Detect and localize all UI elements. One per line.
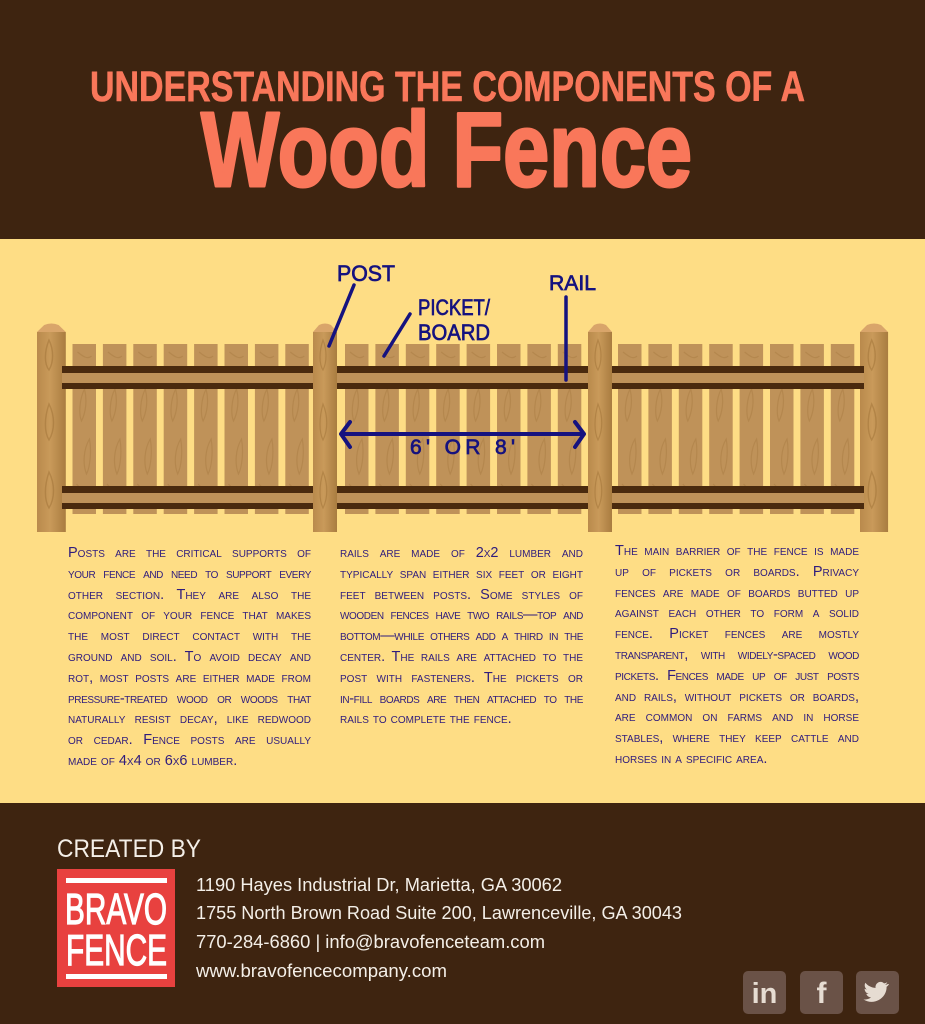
- fence section 3: [612, 344, 864, 514]
- contact details: 1755 North Brown Road Suite 200, Lawrenceville, GA 30043: [196, 903, 682, 923]
- label: picket/board: PICKET/: [418, 295, 491, 320]
- text block: rails: post with fasteners. The pickets or: [340, 670, 583, 686]
- text block: pickets: are common on farms and in horse: [615, 709, 859, 725]
- title: [90, 63, 805, 209]
- label: picket/board: [384, 295, 491, 356]
- label: picket/board: BOARD: [418, 320, 490, 345]
- icon: facebook: f: [816, 977, 828, 1010]
- text block: posts: or cedar. Fence posts are usually: [68, 732, 311, 748]
- text block: posts: other section. They are also the: [68, 587, 311, 603]
- text block: rails: center. The rails are attached to the: [340, 649, 583, 665]
- text block: rails: rails are made of 2x2 lumber and: [340, 545, 583, 561]
- label: rail: [549, 272, 596, 380]
- text block: pickets: and rails, without pickets or boards,: [615, 689, 859, 705]
- contact details: 770-284-6860 | info@bravofenceteam.com: [196, 932, 545, 952]
- text block: posts: rot, most posts are either made from: [68, 670, 311, 686]
- text block: posts: Posts are the critical supports of: [68, 545, 311, 561]
- fence section 1: [62, 344, 314, 514]
- text block: pickets: [615, 543, 859, 767]
- label: post: POST: [337, 261, 395, 286]
- arrow: section width: [341, 422, 584, 459]
- text block: pickets: The main barrier of the fence is made: [615, 543, 859, 559]
- text block: rails: bottom—while others add a third in the: [340, 628, 583, 644]
- text block: posts: your fence and need to support every: [68, 566, 311, 582]
- icon: linkedin: in: [752, 978, 777, 1010]
- contact details: 1190 Hayes Industrial Dr, Marietta, GA 30062: [196, 875, 562, 895]
- text block: pickets: fence. Picket fences are mostly: [615, 626, 859, 642]
- fence section 2: [336, 344, 588, 514]
- text block: posts: the most direct contact with the: [68, 628, 311, 644]
- icon: twitter: [856, 971, 899, 1014]
- contact details: [195, 875, 682, 981]
- logo: Bravo Fence: [57, 869, 175, 987]
- text block: rails: typically span either six feet or eight: [340, 566, 583, 582]
- inner fence posts: [313, 324, 612, 532]
- text block: pickets: fences are made of boards butted up: [615, 585, 859, 601]
- text block: pickets: against each other to form a solid: [615, 605, 859, 621]
- text block: posts: naturally resist decay, like redwood: [68, 711, 311, 727]
- text block: rails: wooden fences have two rails—top and: [340, 607, 583, 623]
- label: rail: RAIL: [549, 272, 596, 295]
- text block: pickets: horses in a specific area.: [615, 751, 767, 767]
- contact details: www.bravofencecompany.com: [195, 961, 447, 981]
- text block: rails: in-fill boards are then attached to the: [340, 691, 583, 707]
- icon: linkedin: [743, 971, 786, 1014]
- text block: pickets: pickets. Fences made up of just posts: [615, 668, 859, 684]
- text block: posts: pressure-treated wood or woods that: [68, 691, 311, 707]
- text block: posts: [68, 545, 312, 769]
- heading: created by: CREATED BY: [57, 835, 201, 863]
- text block: rails: rails to complete the fence.: [340, 711, 512, 727]
- text block: pickets: up of pickets or boards. Privacy: [615, 564, 859, 580]
- text block: rails: feet between posts. Some styles of: [340, 587, 583, 603]
- panel: cream fence background: [0, 239, 925, 803]
- text block: posts: made of 4x4 or 6x6 lumber.: [68, 753, 237, 769]
- label: post: [329, 261, 395, 346]
- text block: pickets: stables, where they keep cattle and: [615, 730, 859, 746]
- text block: rails: [340, 545, 583, 727]
- text block: posts: component of your fence that makes: [68, 607, 311, 623]
- title: Wood Fence: [201, 91, 692, 209]
- logo: Bravo Fence: FENCE: [66, 926, 167, 975]
- outer fence posts: [37, 324, 888, 532]
- icon: facebook: [800, 971, 843, 1014]
- arrow: section width: 6' OR 8': [410, 436, 515, 459]
- text block: posts: ground and soil. To avoid decay and: [68, 649, 311, 665]
- logo: Bravo Fence: BRAVO: [65, 885, 167, 934]
- text block: pickets: transparent, with widely-spaced wood: [615, 647, 859, 663]
